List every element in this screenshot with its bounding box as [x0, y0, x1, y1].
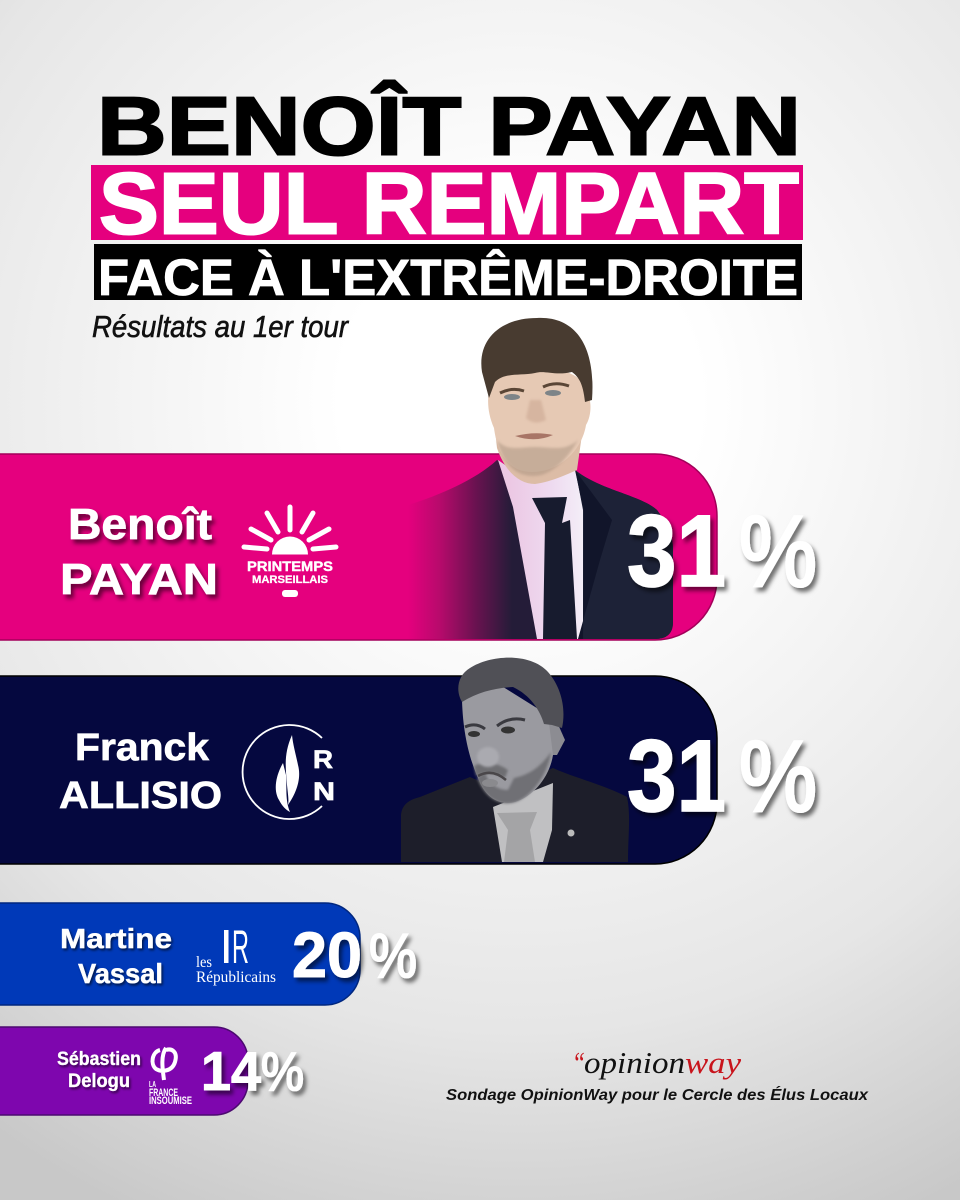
- bar: pink: [0, 454, 717, 640]
- candidate name: [59, 727, 222, 817]
- value: 31%: [627, 719, 817, 833]
- icon: Rassemblement National logo: N: [313, 778, 335, 806]
- icon: Printemps Marseillais logo: PRINTEMPS: [247, 558, 333, 574]
- value: 20%: [292, 919, 417, 991]
- candidate name: [60, 923, 172, 989]
- portrait: Franck Allisio: [401, 658, 629, 862]
- candidate name: [60, 500, 218, 604]
- icon: Printemps Marseillais logo: [244, 507, 336, 597]
- icon: Printemps Marseillais logo: MARSEILLAIS: [252, 574, 328, 586]
- value: 14%: %: [261, 1042, 304, 1102]
- value: 31%: %: [739, 496, 817, 608]
- candidate name: Vassal: [78, 958, 163, 989]
- value: 14%: [201, 1040, 304, 1102]
- candidate name: Sébastien: [57, 1049, 141, 1070]
- logo: OpinionWay: [572, 1045, 741, 1080]
- bar: purple: [0, 1027, 248, 1115]
- panel: Franck Allisio: [0, 658, 817, 864]
- icon: La France Insoumise logo: [149, 1048, 192, 1107]
- candidate name: ALLISIO: [59, 775, 222, 817]
- value: 31%: [627, 494, 817, 608]
- icon: Les Républicains logo: les: [196, 954, 212, 971]
- candidate name: Delogu: [68, 1071, 130, 1092]
- value: 31%: %: [739, 721, 817, 833]
- candidate name: [57, 1049, 141, 1092]
- bar: blue: [0, 903, 360, 1005]
- value: 20%: 20: [292, 919, 362, 991]
- icon: La France Insoumise logo: FRANCE: [149, 1087, 178, 1099]
- candidate name: PAYAN: [60, 555, 218, 604]
- icon: Les Républicains logo: Républicains: [196, 969, 276, 986]
- value: 20%: %: [369, 922, 417, 991]
- panel: Martine Vassal: [0, 903, 417, 1005]
- value: 31%: 31: [627, 719, 726, 833]
- heading: face à l'extrême-droite: FACE À L'EXTRÊME-DROITE: [98, 248, 798, 306]
- icon: La France Insoumise logo: LA: [149, 1080, 156, 1089]
- icon: La France Insoumise logo: INSOUMISE: [149, 1095, 192, 1107]
- heading: Benoît Payan: BENOÎT PAYAN: [97, 80, 801, 172]
- title: [91, 80, 803, 306]
- icon: Les Républicains logo: R: [232, 920, 249, 973]
- icon: Rassemblement National logo: [243, 725, 335, 819]
- bar: navy: [0, 676, 717, 864]
- subtitle: Résultats au 1er tour: [92, 309, 349, 344]
- candidate name: Martine: [60, 923, 172, 954]
- candidate name: Benoît: [68, 500, 212, 549]
- source note: Sondage OpinionWay pour le Cercle des Élus Locaux: [446, 1085, 869, 1104]
- candidate name: Franck: [75, 727, 210, 769]
- logo: OpinionWay: “: [572, 1045, 585, 1080]
- heading: seul rempart: SEUL REMPART: [99, 156, 799, 252]
- logo: OpinionWay: way: [685, 1045, 741, 1080]
- panel: Benoît Payan: [0, 318, 817, 640]
- logo: OpinionWay: opinion: [584, 1045, 685, 1080]
- icon: Les Républicains logo: [196, 920, 276, 986]
- value: 14%: 14: [201, 1040, 261, 1102]
- portrait: Benoît Payan: [408, 318, 673, 639]
- icon: Rassemblement National logo: R: [313, 746, 333, 774]
- panel: Sébastien Delogu: [0, 1027, 304, 1115]
- value: 31%: 31: [627, 494, 726, 608]
